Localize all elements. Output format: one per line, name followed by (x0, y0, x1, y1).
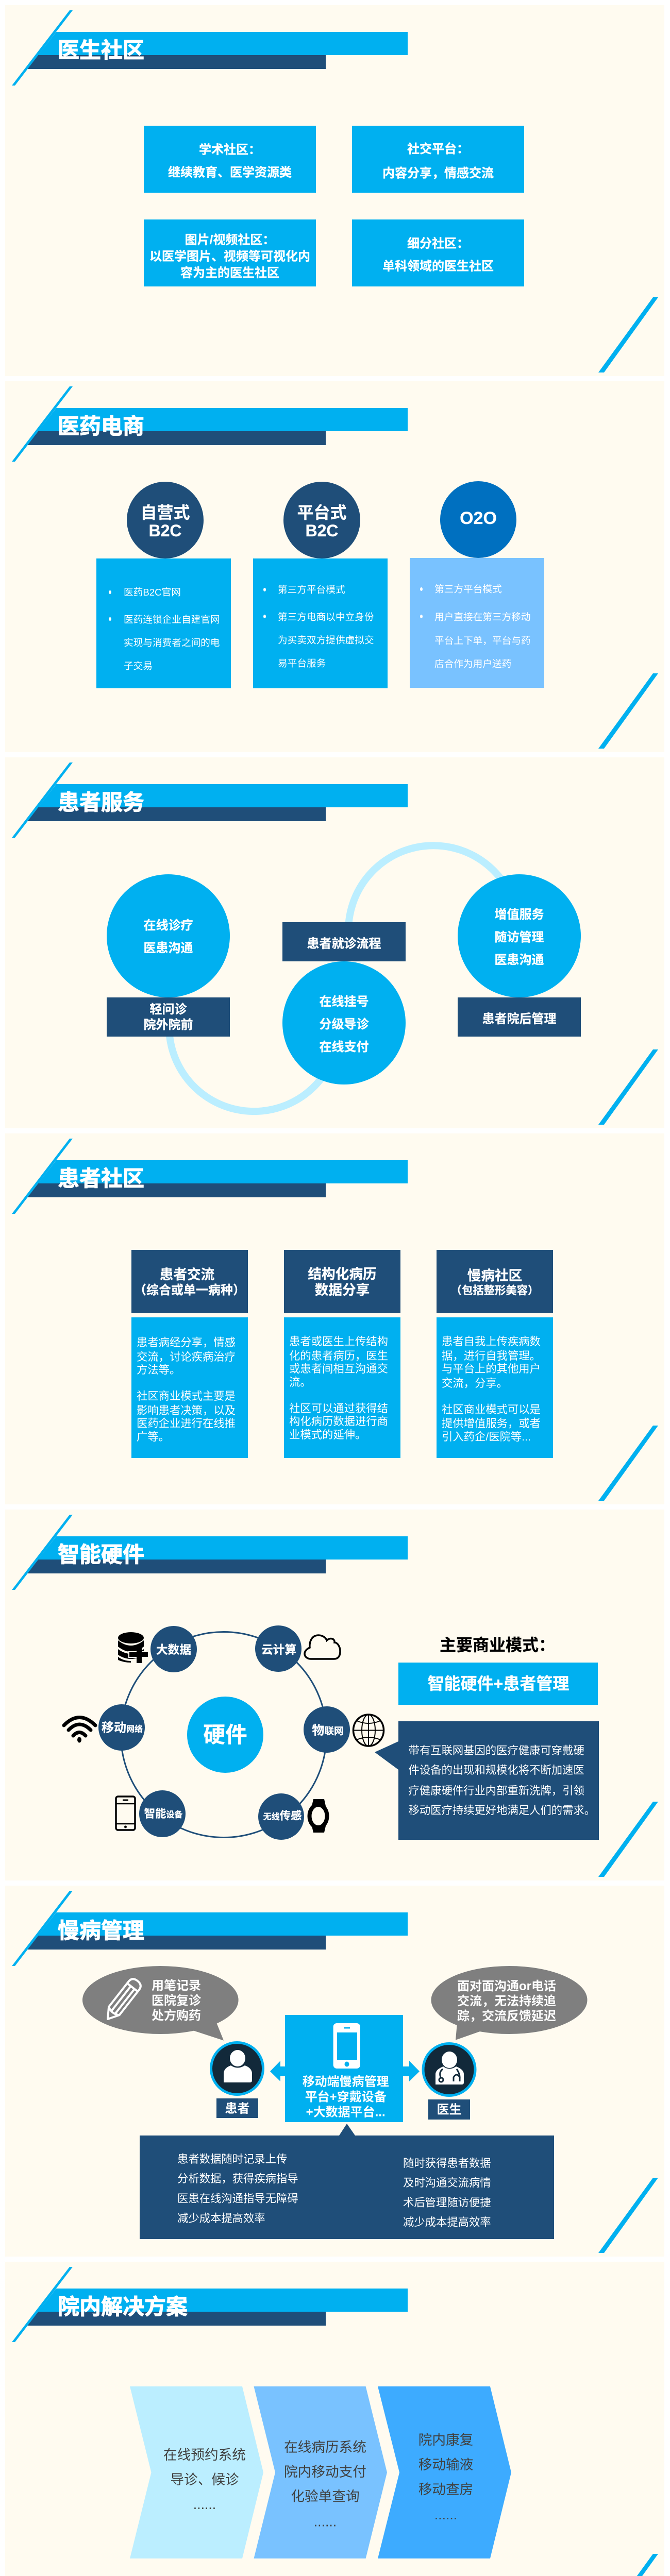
text card: 患者交流说明: 影响患者决策，以及 (137, 1401, 236, 1418)
callout: 说明文字: 移动医疗持续更好地满足人们的需求。 (408, 1804, 595, 1817)
speech bubble: 医生 (431, 1966, 588, 2040)
heading: 患者服务: 患者服务 (58, 790, 144, 815)
panel: 医药电商 (5, 381, 664, 752)
box: 患者就诊流程 (282, 922, 406, 961)
circle: 自营式 B2C: 自营式 (140, 503, 190, 522)
box: 学术社区: 继续教育、医学资源类 (168, 166, 292, 179)
label: 患者 (216, 2098, 258, 2118)
circle: 在线诊疗: 医患沟通 (143, 941, 193, 955)
box: 平台式说明: 为买卖双方提供虚拟交 (278, 635, 374, 645)
panel: 医生社区 (5, 5, 664, 376)
callout: 说明文字 (375, 1721, 599, 1840)
node: 移动网络 (98, 1704, 145, 1751)
node: 无线传感: 无线传感 (263, 1809, 301, 1822)
text card: 结构化病历说明: 流。 (289, 1376, 311, 1388)
icon: watch (309, 1799, 327, 1833)
chevron: 院内康复: 移动输液 (418, 2457, 473, 2472)
chevron: 院内康复: ...... (434, 2507, 457, 2522)
box: 图片/视频社区: 图片/视频社区： (185, 230, 275, 247)
heading: 医药电商: 医药电商 (58, 414, 144, 438)
node: 智能设备: 智能设备 (144, 1807, 182, 1820)
box: 轻问诊 院外院前: 院外院前 (143, 1018, 193, 1032)
text card: 结构化病历说明 (284, 1317, 400, 1458)
circle: O2O (440, 481, 516, 558)
heading: 患者社区 (12, 1139, 408, 1214)
box: O2O说明: 店合作为用户送药 (434, 658, 511, 669)
node: 大数据: 大数据 (156, 1643, 191, 1656)
box: O2O说明: 用户直接在第三方移动 (434, 611, 531, 622)
node: 物联网 (304, 1706, 350, 1753)
text card: 结构化病历说明: 构化病历数据进行商 (289, 1415, 388, 1428)
box: 图片/视频社区 (144, 219, 316, 286)
text card: 结构化病历说明: 社区可以通过获得结 (289, 1402, 388, 1415)
heading: 主要商业模式: 主要商业模式： (440, 1632, 555, 1656)
text card: 患者交流说明: 方法等。 (137, 1364, 180, 1376)
box: 自营式说明 (96, 558, 231, 688)
box: 图片/视频社区: 以医学图片、视频等可视化内 (149, 249, 310, 264)
header: 结构化病历 数据分享: 数据分享 (315, 1282, 370, 1298)
chevron: 在线预约系统: 在线预约系统 (163, 2447, 246, 2463)
header: 患者交流 (131, 1250, 248, 1313)
icon: 医生 (423, 2043, 475, 2096)
header: 慢病社区: （包括整形美容） (451, 1284, 539, 1297)
box: 患者院后管理: 患者院后管理 (482, 1012, 557, 1026)
chevron: 院内康复 (378, 2386, 511, 2558)
heading: 智能硬件: 智能硬件 (58, 1543, 144, 1567)
heading: 医生社区: 医生社区 (58, 38, 144, 62)
box: 患者就诊流程: 患者就诊流程 (307, 937, 381, 951)
speech bubble: 医生: 踪，交流反馈延迟 (457, 2006, 556, 2024)
text card: 慢病社区说明: 社区商业模式可以是 (442, 1403, 541, 1416)
text card: 结构化病历说明: 化的患者病历，医生 (289, 1347, 388, 1363)
header: 患者交流: （综合或单一病种） (134, 1283, 245, 1297)
center circle: 硬件 (187, 1697, 263, 1773)
speech bubble: 医生: 交流，无法持续追 (457, 1991, 556, 2009)
text card: 慢病社区说明: 与平台上的其他用户 (442, 1363, 541, 1375)
text card: 患者交流说明: 广等。 (137, 1430, 170, 1443)
box: 移动端慢病管理平台: +大数据平台... (306, 2105, 386, 2120)
callout: 平台优势: 及时沟通交流病情 (403, 2177, 491, 2189)
box: 轻问诊 院外院前: 轻问诊 (149, 1003, 187, 1016)
chevron: 在线病历系统 (254, 2386, 387, 2558)
label: 患者: 患者 (225, 2102, 249, 2115)
box: 细分社区 (352, 219, 524, 286)
header: 结构化病历 数据分享 (284, 1250, 400, 1313)
box: 患者院后管理 (458, 997, 581, 1037)
text card: 患者交流说明: 交流，讨论疾病治疗 (137, 1348, 236, 1364)
callout: 平台优势: 分析数据，获得疾病指导 (177, 2170, 298, 2186)
text card: 慢病社区说明: 患者自我上传疾病数 (442, 1335, 541, 1348)
ring and icons (62, 1631, 384, 1838)
heading: 医药电商 (12, 386, 408, 462)
icon: cloud (305, 1635, 340, 1659)
box: 自营式说明: 实现与消费者之间的电 (124, 637, 220, 648)
icon: smartphone (116, 1797, 135, 1830)
text card: 慢病社区说明: 交流，分享。 (442, 1375, 508, 1390)
heading: 患者服务 (12, 762, 408, 838)
panel: 智能硬件 (5, 1510, 664, 1880)
box: 平台式说明: 第三方平台模式 (278, 584, 345, 595)
box: 平台式说明: 第三方电商以中立身份 (278, 611, 374, 622)
speech bubble: 患者: 处方购药 (152, 2008, 201, 2023)
circle: 平台式 B2C: B2C (305, 521, 339, 540)
heading: 院内解决方案: 院内解决方案 (58, 2295, 188, 2319)
panel: 慢病管理 (5, 1886, 664, 2257)
circle: 自营式 B2C (127, 482, 204, 558)
callout: 平台优势: 患者数据随时记录上传 (177, 2153, 287, 2165)
speech bubble: 患者: 用笔记录 (152, 1979, 201, 1993)
circle: 在线诊疗 (107, 874, 230, 997)
header: 患者交流: 患者交流 (160, 1267, 214, 1282)
text card: 结构化病历说明: 或患者间相互沟通交 (289, 1363, 388, 1375)
node: 物联网: 物联网 (312, 1724, 344, 1737)
box: 细分社区: 单科领域的医生社区 (382, 260, 494, 273)
callout: 平台优势: 随时获得患者数据 (403, 2157, 491, 2170)
box: 移动端慢病管理平台: 平台+穿戴设备 (305, 2090, 387, 2104)
icon: globe (353, 1715, 384, 1746)
circle: 在线诊疗: 在线诊疗 (143, 919, 193, 933)
heading: 患者社区: 患者社区 (58, 1166, 144, 1191)
node: 云计算 (255, 1625, 301, 1672)
circle: 增值服务 (458, 874, 581, 997)
box: 智能硬件+患者管理 (398, 1663, 598, 1705)
box: 平台式说明 (253, 558, 388, 688)
panel: 患者社区 (5, 1133, 664, 1504)
text card: 结构化病历说明: 患者或医生上传结构 (289, 1335, 388, 1348)
chevron: 在线预约系统: ...... (193, 2497, 216, 2512)
heading: 院内解决方案 (12, 2267, 408, 2342)
panel: 院内解决方案 (5, 2262, 664, 2576)
box: 移动端慢病管理平台 (285, 2015, 403, 2122)
icon: wifi (64, 1718, 95, 1742)
text card: 患者交流说明: 患者病经分享，情感 (137, 1334, 236, 1350)
box: O2O说明: 平台上下单，平台与药 (434, 633, 531, 647)
chevron: 在线预约系统 (130, 2386, 263, 2558)
circle: 在线挂号: 分级导诊 (320, 1018, 369, 1031)
node: 智能设备 (139, 1790, 186, 1837)
box: 移动端慢病管理平台: 移动端慢病管理 (303, 2075, 389, 2089)
speech bubble: 患者 (82, 1966, 239, 2041)
box: 图片/视频社区: 容为主的医生社区 (180, 266, 279, 280)
box: O2O说明 (410, 558, 544, 688)
box: 社交平台 (352, 126, 524, 193)
center circle: 硬件: 硬件 (203, 1723, 247, 1748)
panel: 患者服务 (5, 757, 664, 1128)
text card: 患者交流说明: 医药企业进行在线推 (137, 1417, 236, 1430)
box: 平台式说明: 易平台服务 (278, 657, 326, 669)
text card: 患者交流说明 (131, 1317, 248, 1458)
callout: 平台优势: 医患在线沟通指导无障碍 (177, 2193, 298, 2205)
circle: 在线挂号: 在线支付 (320, 1040, 369, 1054)
chevron: 院内康复: 移动查房 (418, 2482, 473, 2497)
circle: 平台式 B2C: 平台式 (297, 503, 347, 522)
chevron: 在线病历系统: 院内移动支付 (284, 2464, 366, 2480)
heading: 慢病管理: 慢病管理 (58, 1919, 144, 1943)
text card: 慢病社区说明: 引入药企/医院等... (442, 1430, 531, 1443)
chevron: 院内康复: 院内康复 (418, 2432, 473, 2448)
box: 学术社区: 学术社区： (199, 139, 261, 158)
arrows: 双向箭头 (270, 2061, 420, 2081)
callout: 说明文字: 件设备的出现和规模化将不断加速医 (408, 1764, 584, 1776)
icon: 患者 (211, 2042, 263, 2095)
box: 社交平台: 社交平台： (407, 139, 469, 157)
callout: 说明文字: 疗健康硬件行业内部重新洗牌，引领 (408, 1782, 584, 1798)
circle: 自营式 B2C: B2C (148, 521, 182, 540)
node: 大数据 (150, 1626, 197, 1672)
node: 移动网络: 移动网络 (102, 1721, 143, 1735)
arcs: 流程连接线 (166, 842, 504, 1115)
text card: 慢病社区说明 (437, 1317, 553, 1458)
box: 自营式说明: 子交易 (124, 660, 153, 671)
text card: 结构化病历说明: 业模式的延伸。 (289, 1428, 366, 1440)
circle: 平台式 B2C (283, 482, 360, 558)
node: 无线传感 (258, 1793, 304, 1840)
circle: 增值服务: 随访管理 (495, 930, 544, 944)
header: 结构化病历 数据分享: 结构化病历 (308, 1266, 377, 1282)
callout: 平台优势: 术后管理随访便捷 (403, 2197, 491, 2209)
label: 医生 (428, 2099, 470, 2120)
speech bubble: 医生: 面对面沟通or电话 (457, 1979, 556, 1993)
box: 轻问诊 院外院前 (107, 997, 230, 1037)
box: 自营式说明: 医药B2C官网 (124, 587, 181, 598)
heading: 慢病管理 (12, 1891, 408, 1966)
box: O2O说明: 第三方平台模式 (434, 584, 502, 595)
box: 细分社区: 细分社区： (407, 233, 469, 251)
speech bubble: 患者: 医院复诊 (152, 1993, 202, 2008)
header: 慢病社区: 慢病社区 (467, 1268, 522, 1283)
callout: 平台优势: 减少成本提高效率 (403, 2216, 491, 2229)
circle: O2O: O2O (460, 509, 497, 528)
chevron: 在线预约系统: 导诊、候诊 (170, 2472, 239, 2487)
icon: database (118, 1632, 148, 1663)
heading: 医生社区 (12, 10, 408, 86)
header: 慢病社区 (437, 1250, 553, 1313)
circle: 在线挂号 (282, 961, 406, 1084)
circle: 增值服务: 增值服务 (495, 908, 544, 922)
box: 智能硬件+患者管理: 智能硬件+患者管理 (428, 1674, 569, 1693)
chevron: 在线病历系统: 在线病历系统 (284, 2439, 366, 2455)
chevron: 在线病历系统: ...... (314, 2514, 337, 2530)
node: 云计算: 云计算 (261, 1643, 296, 1656)
label: 医生: 医生 (437, 2103, 462, 2116)
box: 学术社区 (144, 126, 316, 193)
box: 自营式说明: 医药连锁企业自建官网 (124, 614, 220, 624)
callout: 平台优势: 减少成本提高效率 (177, 2212, 265, 2225)
text card: 慢病社区说明: 提供增值服务，或者 (442, 1415, 541, 1431)
heading: 智能硬件 (12, 1515, 408, 1590)
circle: 增值服务: 医患沟通 (495, 953, 544, 967)
chevrons: 院内流程 (130, 2386, 511, 2558)
callout: 平台优势 (140, 2124, 554, 2239)
callout: 说明文字: 带有互联网基因的医疗健康可穿戴硬 (408, 1744, 584, 1757)
box: 社交平台: 内容分享，情感交流 (382, 163, 494, 181)
circle: 在线挂号: 在线挂号 (320, 995, 369, 1009)
diagram: 慢病管理流程 (82, 1966, 588, 2239)
text card: 慢病社区说明: 据，进行自我管理。 (442, 1347, 541, 1363)
chevron: 在线病历系统: 化验单查询 (291, 2488, 360, 2504)
text card: 患者交流说明: 社区商业模式主要是 (137, 1390, 236, 1402)
